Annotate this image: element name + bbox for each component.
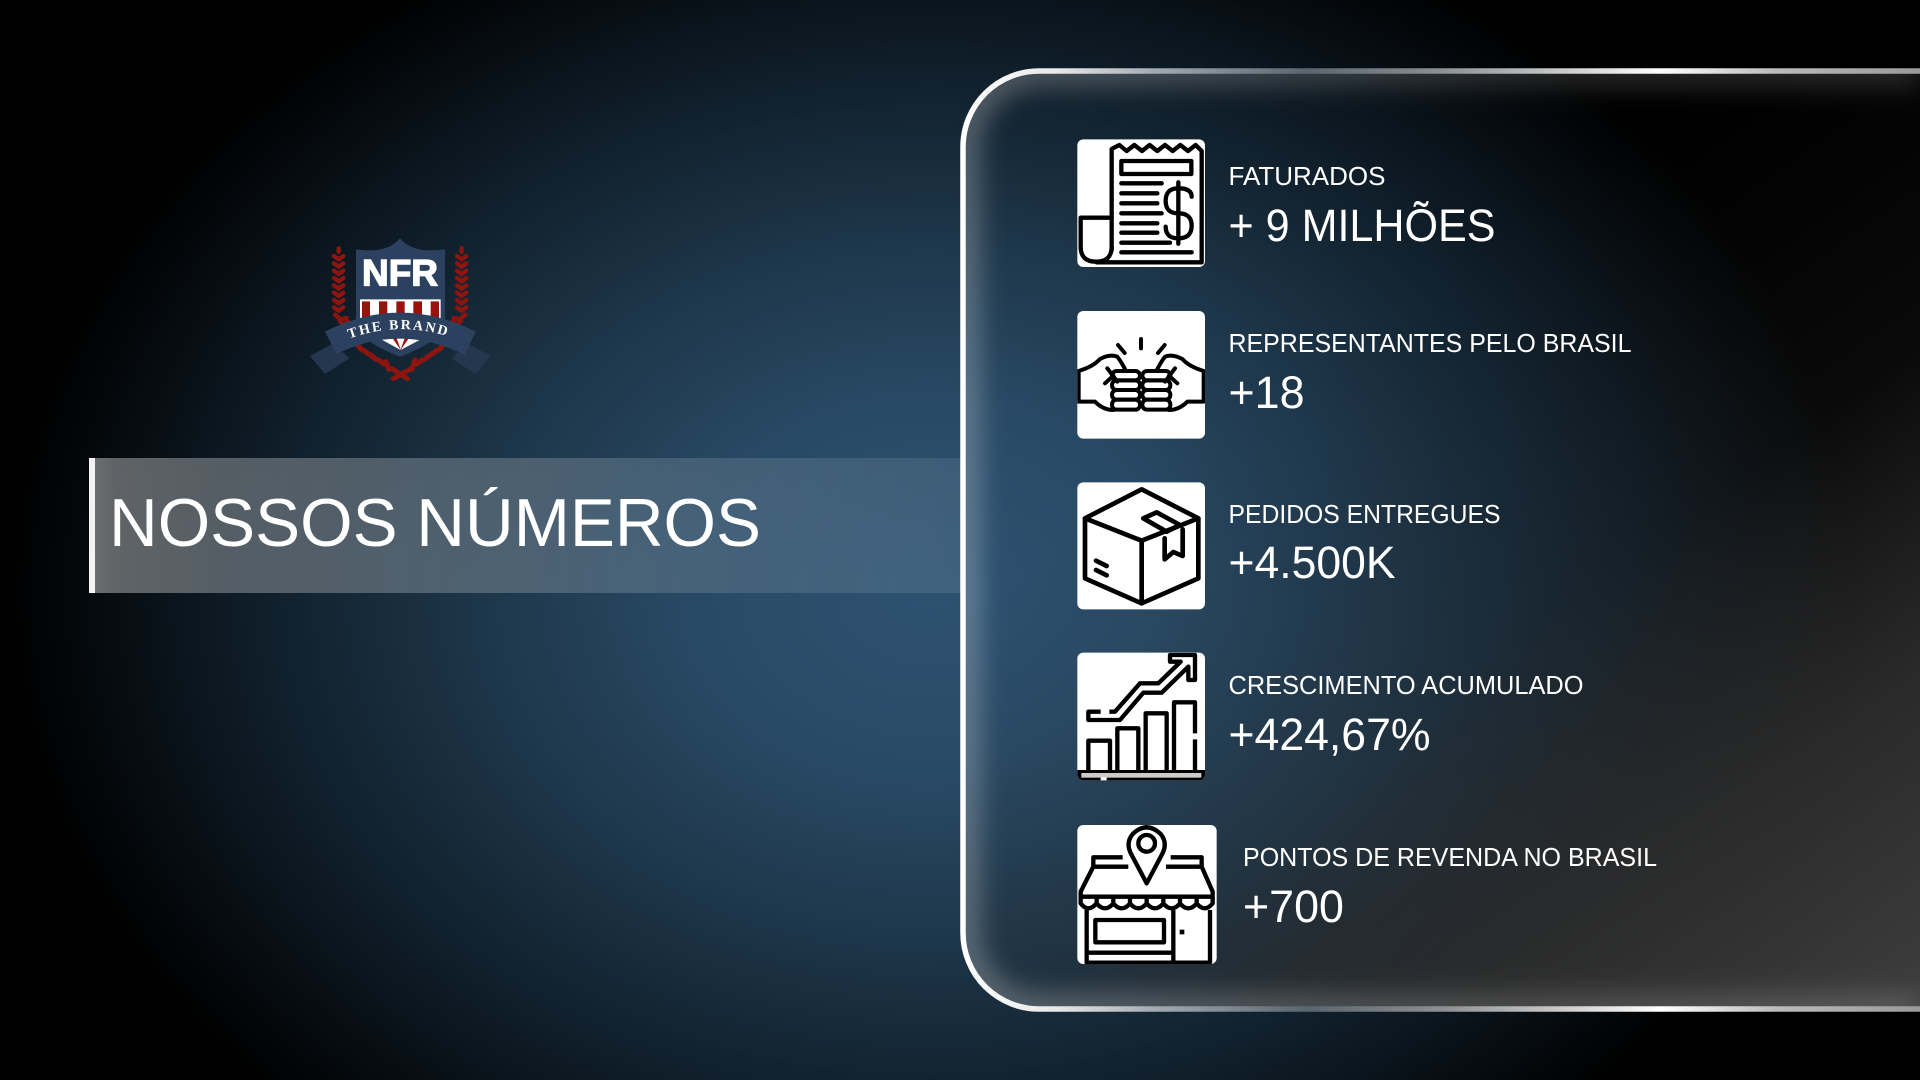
icon: storefront with pin: [1077, 825, 1217, 964]
stat: faturados: FATURADOS: [1228, 163, 1386, 191]
NFR lettering: NFR: [362, 252, 438, 294]
stat: faturados: + 9 MILHÕES: [1228, 200, 1496, 251]
logo: NFR The Brand crest: [310, 238, 490, 382]
stat: pontos de revenda: PONTOS DE REVENDA NO BRASIL: [1243, 844, 1657, 872]
stat: pedidos: PEDIDOS ENTREGUES: [1228, 501, 1500, 529]
icon: growth chart: [1077, 653, 1207, 781]
stat: crescimento: CRESCIMENTO ACUMULADO: [1228, 672, 1584, 700]
stripes: [360, 299, 441, 350]
stat: crescimento: +424,67%: [1228, 709, 1430, 760]
icon: receipt: [1077, 139, 1205, 267]
stat: pontos de revenda: [1243, 844, 1657, 932]
icon: package box: [1077, 482, 1205, 609]
stat: pedidos: [1228, 501, 1500, 588]
ribbon: [325, 313, 476, 355]
stat: representantes: [1228, 330, 1632, 418]
icon: fist bump: [1077, 311, 1205, 439]
ribbon text: THE BRAND: [346, 320, 448, 338]
panel: glass card: [960, 60, 1920, 1020]
ribbon tails: [310, 343, 491, 374]
shield: [356, 238, 445, 357]
stat: representantes: +18: [1228, 367, 1304, 418]
stat: representantes: REPRESENTANTES PELO BRASIL: [1228, 330, 1632, 358]
stat: crescimento: [1228, 672, 1584, 760]
laurel: upper left and right: [334, 248, 466, 379]
stat: pedidos: +4.500K: [1228, 537, 1396, 588]
title: NOSSOS NÚMEROS: [109, 485, 761, 561]
stat: faturados: [1228, 163, 1496, 251]
stat: pontos de revenda: +700: [1243, 881, 1344, 932]
title band: [89, 458, 961, 593]
